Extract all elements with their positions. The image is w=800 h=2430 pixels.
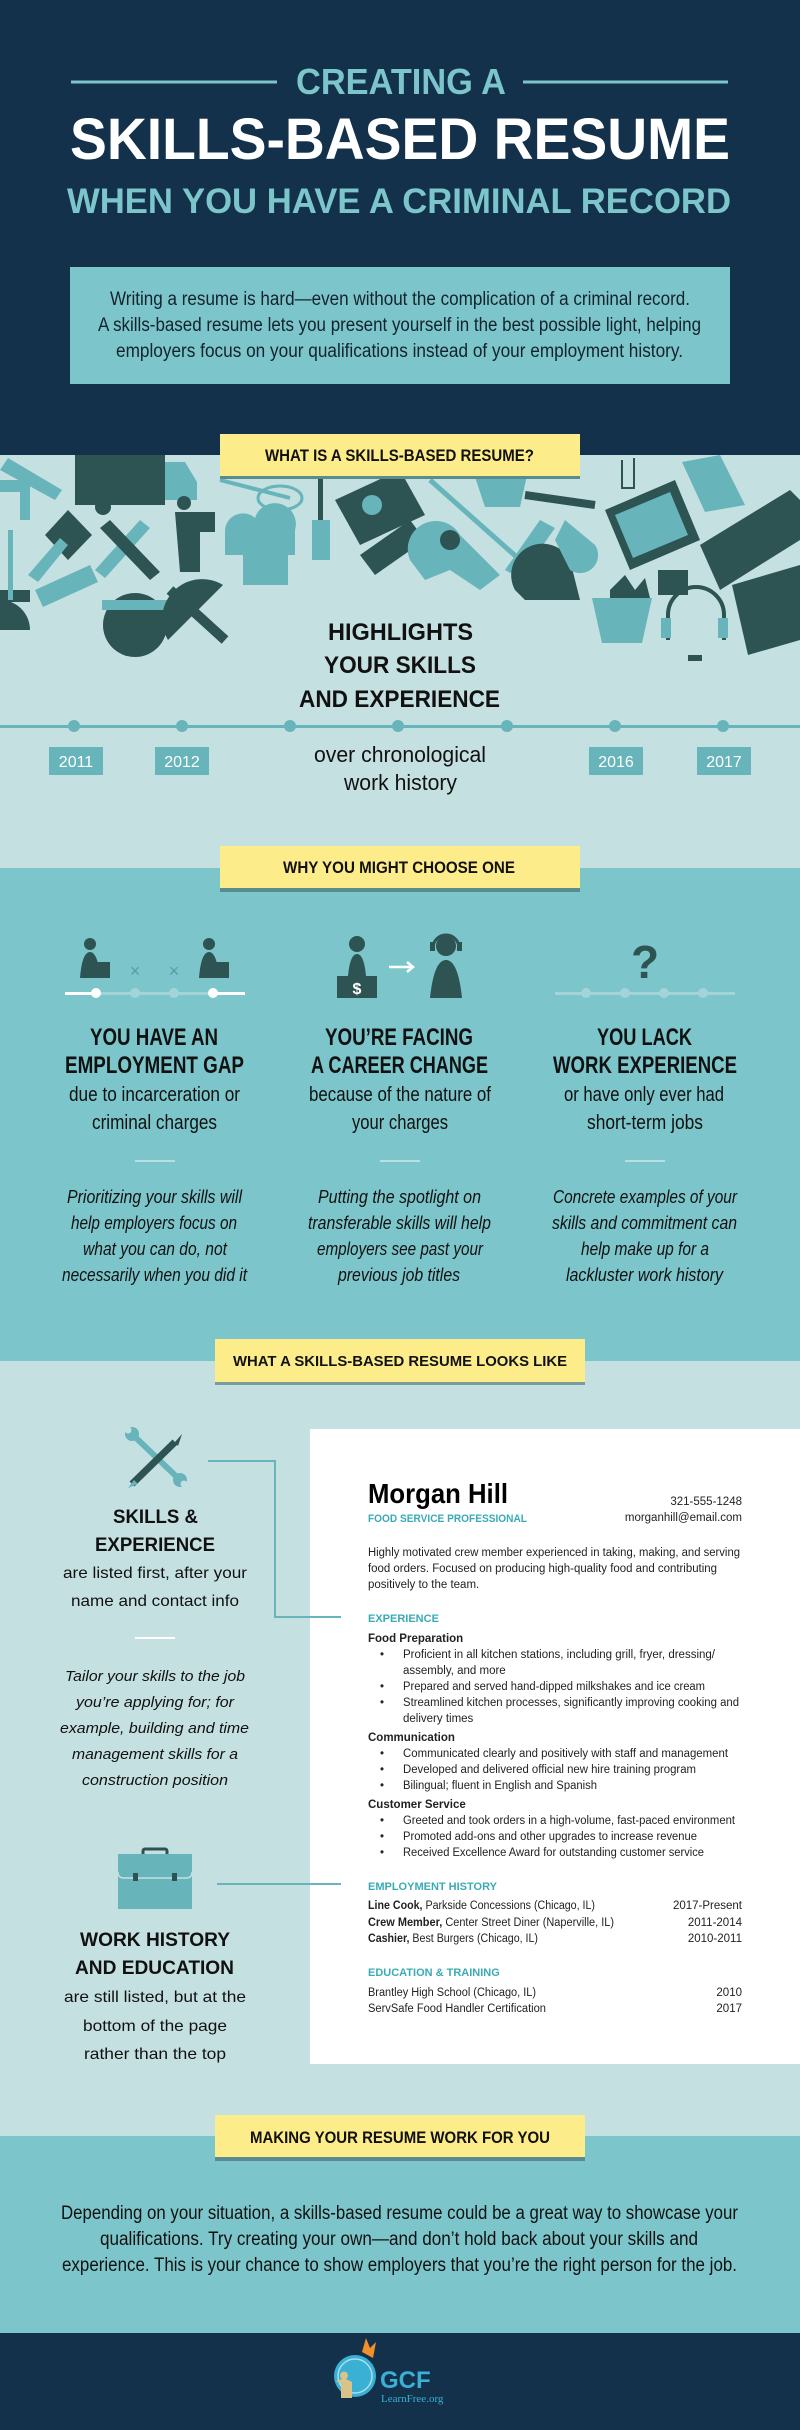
closing text: experience. This is your chance to show employers that you’re the right person for the job.	[62, 2255, 737, 2276]
timeline	[0, 720, 800, 775]
text block: skills & experience: example, building and time	[60, 1720, 249, 1737]
closing text: qualifications. Try creating your own—and don’t hold back about your skills and	[100, 2229, 698, 2250]
over chronological text	[314, 742, 486, 795]
text block: skills & experience: construction position	[82, 1772, 228, 1789]
resume document: 2017-Present	[673, 1900, 743, 1912]
column: employment gap	[62, 938, 248, 1285]
column: career change: Putting the spotlight on	[318, 1187, 481, 1207]
resume document: Highly motivated crew member experienced in taking, making, and serving	[368, 1547, 740, 1559]
resume document: Promoted add-ons and other upgrades to increase revenue	[403, 1831, 697, 1843]
resume document: Streamlined kitchen processes, significantly improving cooking and	[403, 1697, 739, 1709]
footer	[0, 2333, 800, 2430]
icon: wrench and pencil	[124, 1426, 188, 1488]
resume document: •	[380, 1780, 384, 1792]
resume document: positively to the team.	[368, 1579, 479, 1591]
column: career change: A CAREER CHANGE	[311, 1052, 488, 1079]
column: lack experience: YOU LACK	[597, 1024, 692, 1051]
column: employment gap: necessarily when you did it	[62, 1265, 248, 1285]
resume document: 2017	[716, 2003, 742, 2015]
highlights heading: HIGHLIGHTS	[328, 619, 473, 646]
resume document: •	[380, 1764, 384, 1776]
timeline: 2016	[598, 754, 634, 771]
resume document: •	[380, 1831, 384, 1843]
icon collage left	[0, 455, 330, 657]
resume document: assembly, and more	[403, 1665, 506, 1677]
intro box: employers focus on your qualifications instead of your employment history.	[116, 341, 683, 362]
column: employment gap: YOU HAVE AN	[90, 1024, 218, 1051]
section background: looks like	[0, 1361, 800, 2136]
text block: skills & experience: management skills for a	[72, 1746, 238, 1763]
connector arrow: work history	[217, 1883, 341, 1885]
icon: gap timeline: ×	[169, 961, 179, 981]
resume document: EMPLOYMENT HISTORY	[368, 1881, 498, 1893]
icon: question timeline: ?	[631, 936, 659, 988]
column: lack experience: Concrete examples of your	[553, 1187, 738, 1207]
text block: skills & experience: are listed first, after your	[63, 1565, 248, 1582]
column: lack experience	[552, 936, 738, 1285]
resume document: Communication	[368, 1732, 455, 1744]
column: career change: YOU’RE FACING	[325, 1024, 473, 1051]
icon: question timeline	[555, 936, 735, 998]
title: CREATING A	[296, 61, 506, 102]
label: what a skills-based resume looks like: WHAT A SKILLS-BASED RESUME LOOKS LIKE	[233, 1353, 567, 1370]
text block: work history and education: rather than the top	[84, 2046, 226, 2063]
resume document: •	[380, 1681, 384, 1693]
timeline: 2011	[59, 754, 93, 771]
title: WHEN YOU HAVE A CRIMINAL RECORD	[67, 182, 731, 221]
resume document: FOOD SERVICE PROFESSIONAL	[368, 1513, 527, 1525]
text block: work history and education	[64, 1930, 246, 2063]
column: employment gap: EMPLOYMENT GAP	[65, 1052, 244, 1079]
column: lack experience: lackluster work history	[566, 1265, 724, 1285]
resume document: •	[380, 1847, 384, 1859]
intro box: A skills-based resume lets you present yourself in the best possible light, helping	[98, 315, 701, 336]
icon: career change	[337, 935, 462, 998]
resume document: Crew Member, Center Street Diner (Naperville, IL)	[368, 1917, 614, 1929]
label: what a skills-based resume looks like	[215, 1339, 585, 1385]
logo: GCF LearnFree: GCF	[380, 2367, 431, 2394]
column: employment gap: what you can do, not	[83, 1239, 228, 1259]
text block: skills & experience: EXPERIENCE	[95, 1535, 215, 1556]
label: what is a skills-based resume: WHAT IS A SKILLS-BASED RESUME?	[265, 446, 534, 465]
resume document: 2010	[716, 1987, 742, 1999]
resume document	[310, 1429, 800, 2064]
resume document: delivery times	[403, 1713, 474, 1725]
timeline: 2012	[164, 754, 200, 771]
column: employment gap: Prioritizing your skills will	[67, 1187, 243, 1207]
section background: why	[0, 868, 800, 1361]
column: career change: employers see past your	[317, 1239, 484, 1259]
column: lack experience: help make up for a	[581, 1239, 709, 1259]
resume document: Food Preparation	[368, 1633, 463, 1645]
section background: making it work	[0, 2136, 800, 2333]
over chronological text: work history	[343, 770, 457, 795]
column: career change: transferable skills will help	[308, 1213, 491, 1233]
highlights heading: AND EXPERIENCE	[299, 686, 500, 713]
text block: work history and education: bottom of the page	[83, 2018, 227, 2035]
label: what is a skills-based resume	[220, 434, 580, 479]
logo: GCF LearnFree	[334, 2338, 444, 2405]
highlights heading	[299, 619, 500, 713]
column: employment gap: help employers focus on	[71, 1213, 237, 1233]
resume document: 2011-2014	[688, 1917, 743, 1929]
column: career change: because of the nature of	[309, 1084, 491, 1106]
text block: skills & experience: Tailor your skills to the job	[65, 1668, 245, 1685]
column: lack experience: or have only ever had	[564, 1084, 724, 1106]
resume document: •	[380, 1649, 384, 1661]
header background	[0, 0, 800, 455]
text block: skills & experience	[60, 1507, 249, 1789]
intro box: Writing a resume is hard—even without the complication of a criminal record.	[110, 289, 690, 310]
highlights heading: YOUR SKILLS	[324, 652, 476, 679]
resume document: Cashier, Best Burgers (Chicago, IL)	[368, 1933, 538, 1945]
resume document: Developed and delivered official new hire training program	[403, 1764, 696, 1776]
column: career change	[308, 935, 491, 1285]
column: lack experience: skills and commitment can	[552, 1213, 737, 1233]
logo: GCF LearnFree: LearnFree.org	[381, 2393, 444, 2405]
icon collage right	[335, 455, 800, 661]
intro box	[70, 267, 730, 384]
closing text	[61, 2203, 739, 2276]
resume document: Line Cook, Parkside Concessions (Chicago, IL)	[368, 1900, 595, 1912]
resume document: Morgan Hill	[368, 1478, 508, 1509]
resume document: Brantley High School (Chicago, IL)	[368, 1987, 536, 1999]
over chronological text: over chronological	[314, 742, 486, 767]
text block: work history and education: are still listed, but at the	[64, 1989, 246, 2006]
column: employment gap: due to incarceration or	[69, 1084, 240, 1106]
resume document: 2010-2011	[688, 1933, 742, 1945]
icon: gap timeline	[65, 938, 245, 998]
text block: skills & experience: you’re applying for; for	[75, 1694, 235, 1711]
column: career change: your charges	[352, 1112, 448, 1134]
resume document: Proficient in all kitchen stations, including grill, fryer, dressing/	[403, 1649, 716, 1661]
resume document: Bilingual; fluent in English and Spanish	[403, 1780, 597, 1792]
icon: briefcase	[118, 1849, 192, 1909]
resume document: ServSafe Food Handler Certification	[368, 2003, 546, 2015]
section background: what is	[0, 455, 800, 868]
connector arrow: skills	[208, 1461, 341, 1617]
title: SKILLS-BASED RESUME	[70, 107, 730, 172]
icon: gap timeline: ×	[130, 961, 140, 981]
resume document: EDUCATION & TRAINING	[368, 1967, 500, 1979]
label: making your resume work for you	[215, 2115, 585, 2161]
resume document: Customer Service	[368, 1799, 466, 1811]
column: employment gap: criminal charges	[92, 1112, 217, 1134]
text block: work history and education: AND EDUCATION	[75, 1958, 234, 1979]
column: lack experience: WORK EXPERIENCE	[553, 1052, 737, 1079]
text block: skills & experience: name and contact info	[71, 1593, 239, 1610]
label: why you might choose one: WHY YOU MIGHT CHOOSE ONE	[283, 858, 515, 877]
resume document: Prepared and served hand-dipped milkshakes and ice cream	[403, 1681, 705, 1693]
resume document: •	[380, 1748, 384, 1760]
resume document: morganhill@email.com	[625, 1512, 742, 1524]
text block: skills & experience: SKILLS &	[113, 1507, 198, 1528]
resume document: Greeted and took orders in a high-volume, fast-paced environment	[403, 1815, 736, 1827]
resume document: •	[380, 1697, 384, 1709]
resume document: 321-555-1248	[670, 1496, 742, 1508]
column: lack experience: short-term jobs	[587, 1112, 703, 1134]
resume document: food orders. Focused on producing high-quality food and contributing	[368, 1563, 717, 1575]
icon: career change: $	[353, 981, 362, 998]
resume document: •	[380, 1815, 384, 1827]
text block: work history and education: WORK HISTORY	[80, 1930, 230, 1951]
label: making your resume work for you: MAKING YOUR RESUME WORK FOR YOU	[250, 2128, 550, 2147]
resume document: Received Excellence Award for outstanding customer service	[403, 1847, 704, 1859]
timeline: 2017	[706, 754, 742, 771]
column: career change: previous job titles	[337, 1265, 460, 1285]
label: why you might choose one	[220, 846, 580, 892]
resume document: Communicated clearly and positively with staff and management	[403, 1748, 729, 1760]
resume document: EXPERIENCE	[368, 1613, 439, 1625]
title	[67, 61, 731, 221]
